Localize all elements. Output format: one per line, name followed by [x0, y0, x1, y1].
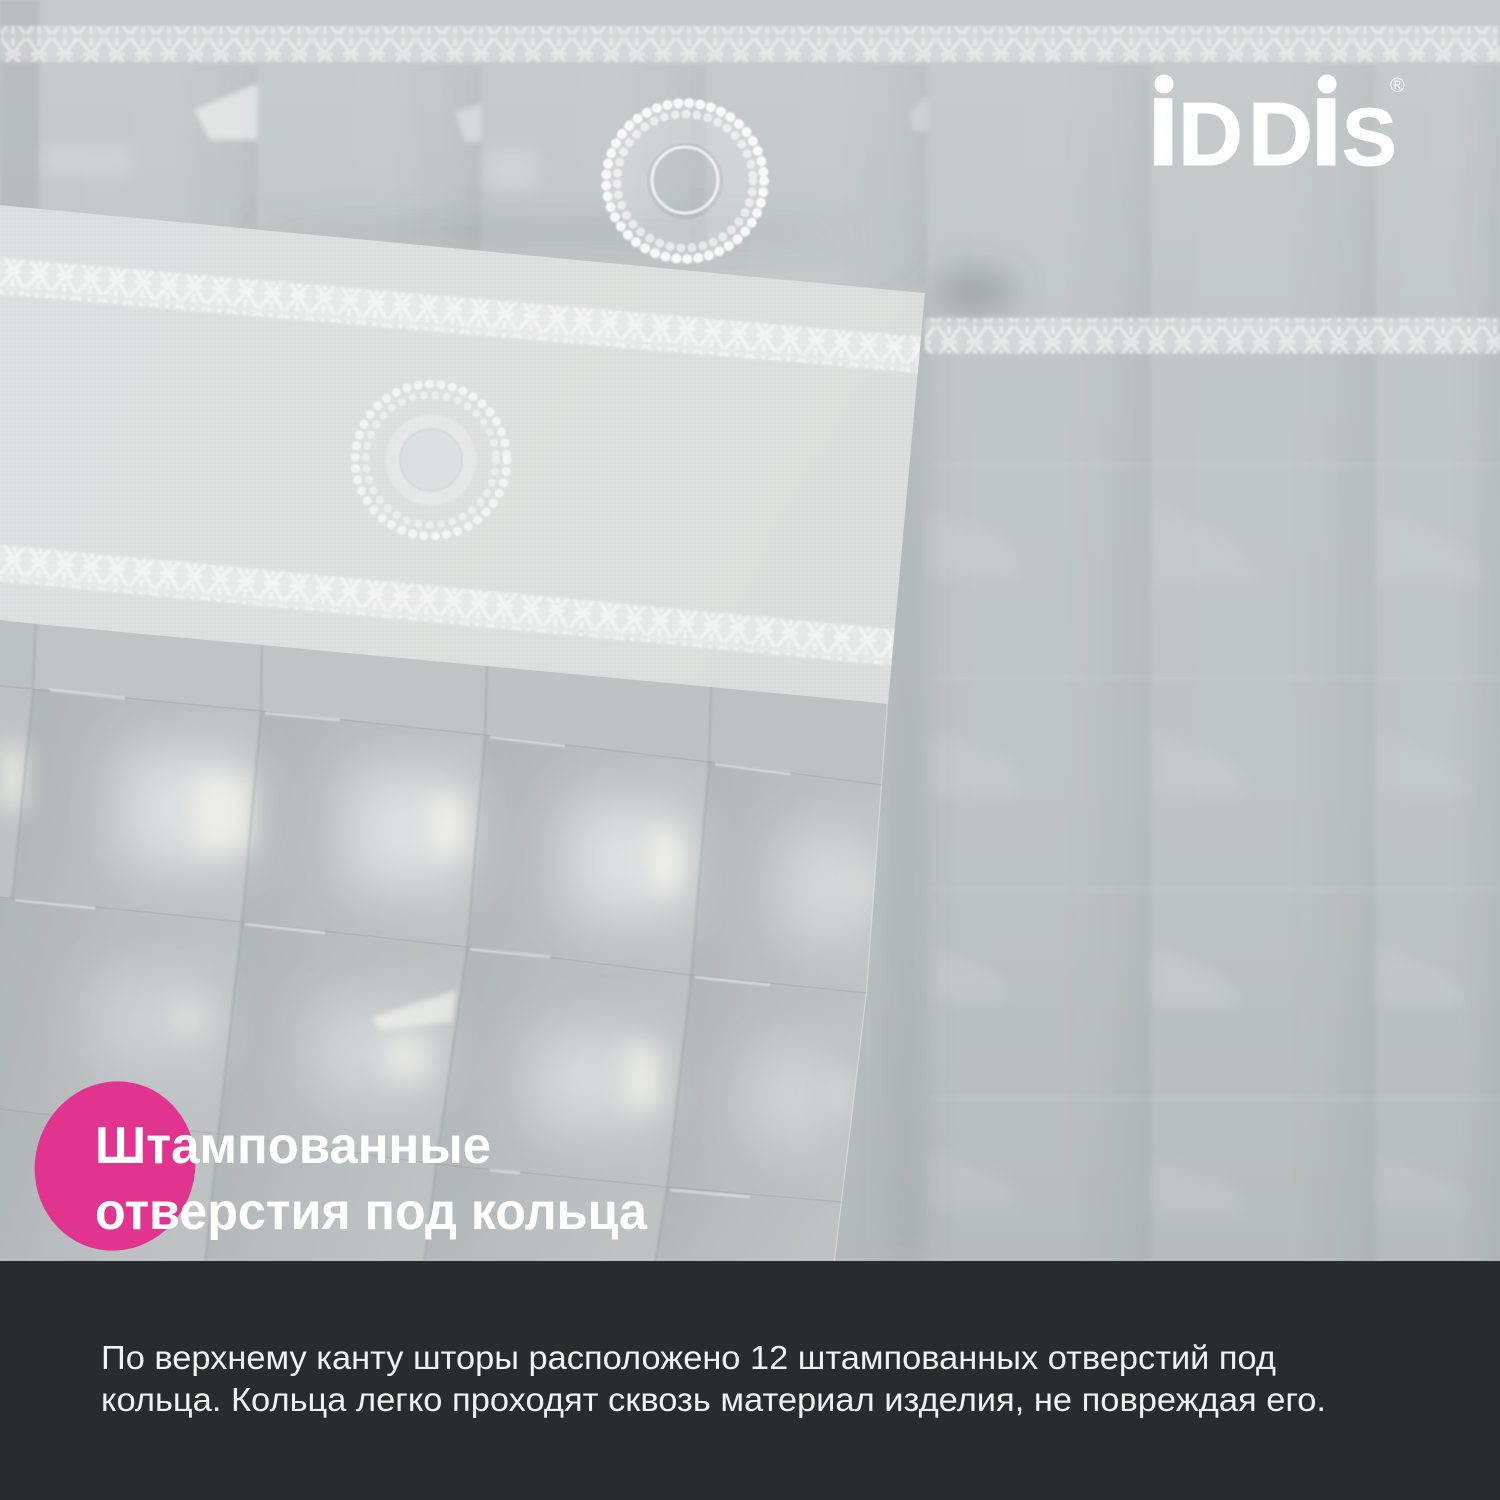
back curtain top stitching: [0, 26, 1500, 62]
front curtain edge highlight: [835, 703, 888, 1261]
logo dot right: [1318, 74, 1336, 94]
lower stitching on front band: [0, 544, 908, 667]
stamped ring on front band: [355, 384, 507, 536]
footer band: [0, 1261, 1500, 1500]
upper stitching on front band: [0, 257, 938, 374]
logo wordmark: D: [1248, 85, 1313, 185]
description text: кольца. Кольца легко проходят сквозь материал изделия, не повреждая его.: [101, 1381, 1326, 1418]
panel top textile band: [0, 205, 925, 710]
logo: IDDIS: [1154, 74, 1404, 166]
description text: [101, 1339, 1326, 1418]
logo wordmark: i: [1309, 53, 1344, 192]
title: [95, 1117, 648, 1241]
logo wordmark: D: [1178, 85, 1243, 185]
title: отверстия под кольца: [95, 1183, 648, 1241]
description text: По верхнему канту шторы расположено 12 штампованных отверстий под: [101, 1339, 1276, 1376]
soft highlights on cubes: [0, 745, 870, 1145]
logo wordmark: i: [1146, 53, 1181, 192]
logo wordmark: S: [1342, 92, 1397, 183]
title: Штампованные: [95, 1117, 491, 1175]
back curtain stamped ring: [606, 103, 764, 259]
lenticular cube pattern on front curtain: [0, 620, 890, 1262]
logo registered mark: ®: [1390, 75, 1405, 97]
logo dot left: [1154, 74, 1174, 94]
back curtain right stitching: [925, 318, 1500, 354]
cube edges: [0, 624, 882, 1262]
pink accent ellipse: [15, 1062, 215, 1270]
panel: front curtain: [0, 205, 938, 1262]
